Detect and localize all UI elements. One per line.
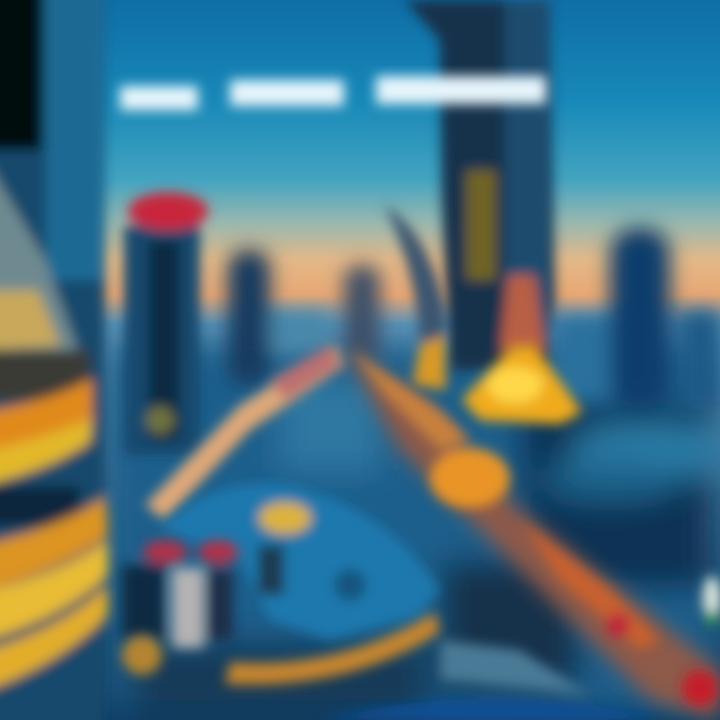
lower city base (110, 345, 720, 710)
diagonal road with traffic lights (345, 350, 720, 720)
tower golden base (462, 345, 582, 424)
curved secondary tower (385, 205, 446, 390)
left foreground building (0, 0, 108, 720)
blurred title text (120, 76, 546, 110)
diagonal light trail left (145, 345, 345, 520)
foreground blue dome (320, 640, 650, 720)
golden plaza edge (122, 612, 440, 685)
red canopies and plaza buildings (122, 540, 238, 648)
blue plaza (160, 483, 440, 640)
distant towers (228, 228, 720, 410)
central tall tower (405, 0, 555, 370)
red-capped tower (124, 192, 208, 455)
